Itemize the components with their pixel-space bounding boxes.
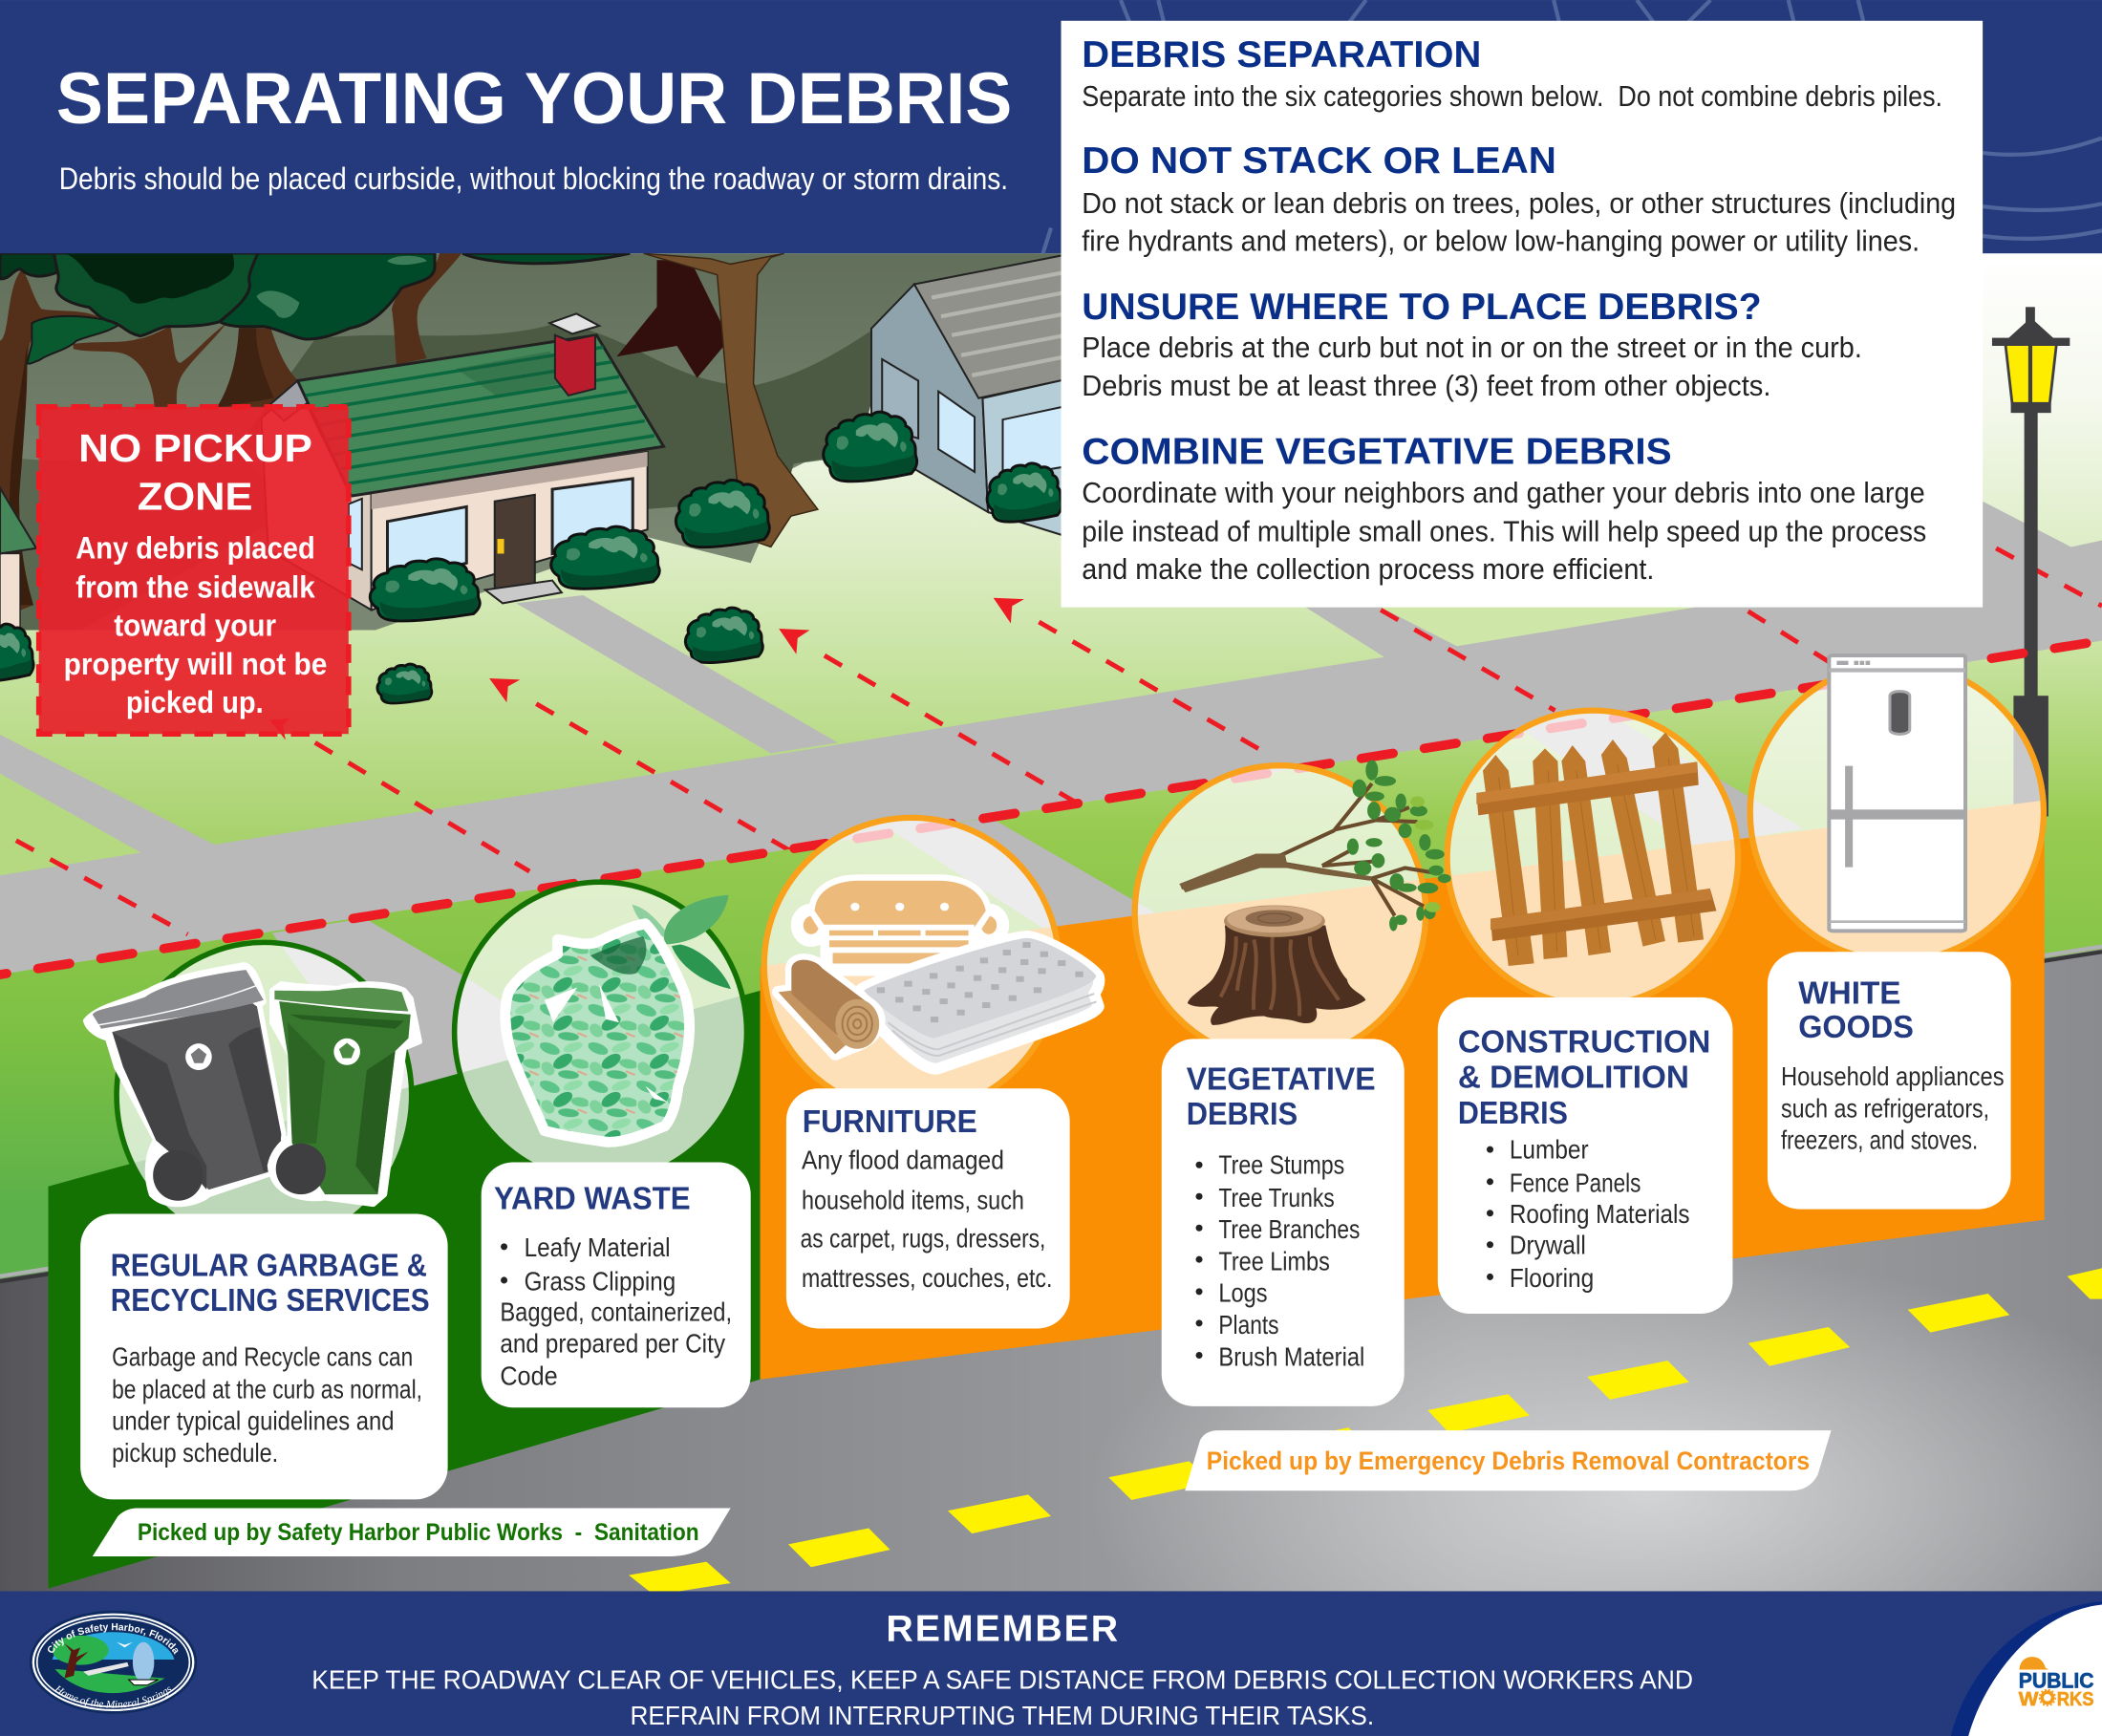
heading: debris separation: DEBRIS SEPARATION bbox=[1082, 34, 1481, 75]
text: construction list: Lumber bbox=[1510, 1134, 1589, 1164]
text: vegetative list: Plants bbox=[1218, 1310, 1279, 1340]
card: furniture bbox=[786, 1088, 1070, 1328]
heading: construction and demolition: DEBRIS bbox=[1458, 1096, 1568, 1131]
heading: furniture: FURNITURE bbox=[803, 1104, 977, 1140]
footer band bbox=[0, 1591, 2102, 1736]
text: combine: and make the collection process more efficient. bbox=[1082, 554, 1654, 586]
text: vegetative list bbox=[1196, 1150, 1364, 1372]
text: no pickup body: Any debris placed bbox=[75, 530, 315, 565]
heading: no pickup zone: ZONE bbox=[138, 475, 252, 519]
text: no pickup body: toward your bbox=[114, 609, 276, 643]
text: vegetative list: Brush Material bbox=[1218, 1342, 1364, 1372]
text: remember message: KEEP THE ROADWAY CLEAR OF VEHICLES, KEEP A SAFE DISTANCE FROM DEBRIS COLLECTION WORKERS AND bbox=[311, 1664, 1693, 1694]
icon: sofa, rolled carpet and mattress bbox=[779, 881, 1099, 1069]
heading: construction and demolition: CONSTRUCTION bbox=[1458, 1024, 1710, 1060]
text: vegetative list: Logs bbox=[1218, 1277, 1268, 1307]
label: picked up by contractors: Picked up by Emergency Debris Removal Contractors bbox=[1207, 1447, 1810, 1475]
text: construction list: Flooring bbox=[1510, 1263, 1594, 1293]
heading: vegetative debris: VEGETATIVE bbox=[1187, 1062, 1376, 1098]
text: debris separation: Separate into the six categories shown below. Do not combine debris piles. bbox=[1082, 81, 1942, 113]
text: white goods body: Household appliances bbox=[1781, 1061, 2005, 1091]
text: no pickup body: picked up. bbox=[126, 685, 264, 719]
heading: regular garbage and recycling bbox=[111, 1249, 430, 1318]
text: construction list: Drywall bbox=[1510, 1230, 1586, 1259]
text: yard waste list: Leafy Material bbox=[525, 1232, 671, 1262]
text: construction list bbox=[1487, 1134, 1690, 1293]
icon: public works logo: PUBLIC bbox=[2019, 1668, 2094, 1692]
label: picked up by public works: Picked up by Safety Harbor Public Works - Sanitation bbox=[138, 1519, 699, 1546]
circle: white goods bbox=[1750, 664, 2044, 961]
text: furniture body: Any flood damaged bbox=[802, 1145, 1004, 1174]
icon: public works logo bbox=[1951, 1601, 2102, 1736]
circle: construction debris bbox=[1448, 711, 1738, 1005]
trees bbox=[0, 253, 818, 618]
icon: city seal: Home of the Mineral Springs bbox=[55, 1685, 172, 1708]
title: SEPARATING YOUR DEBRIS bbox=[56, 58, 1012, 139]
header band bbox=[0, 0, 2102, 253]
text: do not stack: fire hydrants and meters), or below low-hanging power or utility lines. bbox=[1082, 225, 1920, 257]
text: combine: pile instead of multiple small ones. This will help speed up the process bbox=[1082, 516, 1926, 547]
icon: public works logo: RKS bbox=[2057, 1688, 2093, 1710]
icon: city seal: City of Safety Harbor, Florida bbox=[48, 1623, 178, 1655]
circle: furniture bbox=[764, 818, 1059, 1113]
text: remember message bbox=[311, 1664, 1693, 1730]
label: picked up by public works bbox=[93, 1508, 731, 1556]
green curb strip bbox=[0, 641, 2102, 1279]
text: vegetative list: Tree Trunks bbox=[1218, 1183, 1335, 1212]
heading: no pickup zone bbox=[78, 426, 312, 519]
text: yard waste list: Bagged, containerized, bbox=[500, 1297, 732, 1327]
lamp post bbox=[1992, 307, 2070, 816]
icon: city seal bbox=[30, 1611, 197, 1714]
card: regular garbage and recycling bbox=[80, 1213, 448, 1499]
orange contractor panel bbox=[761, 801, 2045, 1380]
lawn corner bbox=[0, 774, 140, 875]
heading: remember: REMEMBER bbox=[886, 1607, 1118, 1649]
text: no pickup body: property will not be bbox=[64, 647, 327, 681]
text: white goods body: such as refrigerators, bbox=[1781, 1094, 1989, 1124]
text: construction list: Fence Panels bbox=[1510, 1168, 1641, 1197]
text: white goods body: freezers, and stoves. bbox=[1781, 1125, 1978, 1154]
text: furniture body: mattresses, couches, etc. bbox=[802, 1263, 1052, 1293]
text: vegetative list: Tree Limbs bbox=[1218, 1246, 1330, 1275]
text: garbage body: Garbage and Recycle cans can bbox=[112, 1341, 413, 1371]
panel: no pickup zone bbox=[39, 407, 349, 734]
icon: public works logo: W bbox=[2019, 1688, 2039, 1710]
text: combine bbox=[1082, 478, 1926, 586]
heading: regular garbage and recycling: RECYCLING SERVICES bbox=[111, 1283, 430, 1318]
text: remember message: REFRAIN FROM INTERRUPTING THEM DURING THEIR TASKS. bbox=[630, 1701, 1374, 1730]
text: garbage body: pickup schedule. bbox=[112, 1438, 278, 1468]
circle: garbage and recycling bbox=[117, 942, 412, 1248]
heading: white goods bbox=[1798, 975, 1914, 1045]
text: yard waste list: Code bbox=[500, 1361, 558, 1390]
yellow road dashes bbox=[629, 1268, 2102, 1596]
card: construction and demolition debris bbox=[1438, 997, 1732, 1314]
heading: construction and demolition: & DEMOLITION bbox=[1458, 1061, 1689, 1096]
subtitle: Debris should be placed curbside, without blocking the roadway or storm drains. bbox=[59, 161, 1008, 196]
text: furniture body bbox=[801, 1145, 1052, 1293]
icon: wooden fence panel bbox=[1476, 733, 1716, 966]
text: furniture body: as carpet, rugs, dressers, bbox=[801, 1223, 1045, 1253]
text: do not stack: Do not stack or lean debris on trees, poles, or other structures (including bbox=[1082, 188, 1956, 220]
sidewalk and driveways bbox=[0, 502, 2102, 975]
heading: do not stack or lean: DO NOT STACK OR LEAN bbox=[1082, 140, 1556, 182]
card: vegetative debris bbox=[1162, 1039, 1405, 1406]
text: vegetative list: Tree Branches bbox=[1218, 1214, 1360, 1244]
text: unsure: Debris must be at least three (3) feet from other objects. bbox=[1082, 371, 1770, 402]
text: furniture body: household items, such bbox=[802, 1186, 1024, 1215]
circle: vegetative debris bbox=[1135, 765, 1426, 1061]
heading: no pickup zone: NO PICKUP bbox=[78, 426, 312, 470]
text: yard waste list: Grass Clipping bbox=[525, 1266, 676, 1296]
blue neighbouring house bbox=[871, 255, 1065, 536]
left neighbouring house bbox=[0, 488, 36, 630]
text: construction list: Roofing Materials bbox=[1510, 1199, 1690, 1229]
driveway crossings bbox=[272, 716, 1803, 1113]
text: garbage body: be placed at the curb as normal, bbox=[112, 1374, 422, 1404]
heading: construction and demolition bbox=[1458, 1024, 1710, 1131]
shrubs bbox=[0, 412, 1062, 703]
text: do not stack bbox=[1082, 188, 1956, 257]
panel: debris guidance bbox=[1062, 21, 1983, 608]
roadway bbox=[0, 947, 2102, 1596]
wooded backdrop bbox=[0, 253, 1062, 630]
heading: vegetative debris bbox=[1187, 1062, 1376, 1132]
green sanitation panel bbox=[49, 991, 761, 1589]
icon: refrigerator bbox=[1829, 655, 1965, 931]
icon: bagged yard waste with leaves bbox=[505, 895, 731, 1142]
text: yard waste list: and prepared per City bbox=[500, 1329, 725, 1359]
label: picked up by contractors bbox=[1185, 1430, 1832, 1490]
icon: garbage and recycling bins bbox=[86, 965, 419, 1204]
text: yard waste list bbox=[500, 1232, 732, 1390]
heading: unsure where to place debris: UNSURE WHERE TO PLACE DEBRIS? bbox=[1082, 287, 1762, 328]
text: garbage body: under typical guidelines and bbox=[112, 1406, 394, 1436]
header line pattern bbox=[1043, 0, 2102, 253]
text: unsure: Place debris at the curb but not in or on the street or in the curb. bbox=[1082, 332, 1862, 364]
red dashed property lines with arrows bbox=[16, 548, 2102, 934]
heading: vegetative debris: DEBRIS bbox=[1187, 1097, 1298, 1132]
text: unsure bbox=[1082, 332, 1862, 402]
card: white goods bbox=[1768, 952, 2011, 1210]
text: white goods body bbox=[1781, 1061, 2005, 1154]
text: combine: Coordinate with your neighbors and gather your debris into one large bbox=[1082, 478, 1925, 509]
heading: combine vegetative debris: COMBINE VEGETATIVE DEBRIS bbox=[1082, 431, 1672, 472]
heading: white goods: WHITE bbox=[1798, 975, 1901, 1011]
red dashed curb line bbox=[0, 641, 2102, 975]
card: yard waste bbox=[482, 1162, 751, 1407]
heading: yard waste: YARD WASTE bbox=[494, 1182, 691, 1217]
heading: white goods: GOODS bbox=[1798, 1010, 1914, 1045]
main house bbox=[262, 313, 664, 610]
icon: tree stump and branch bbox=[1179, 760, 1451, 1025]
heading: regular garbage and recycling: REGULAR GARBAGE & bbox=[111, 1249, 427, 1284]
circle: yard waste bbox=[455, 882, 747, 1183]
text: garbage body bbox=[112, 1341, 422, 1468]
text: no pickup body bbox=[64, 530, 327, 719]
text: no pickup body: from the sidewalk bbox=[75, 570, 315, 605]
lawn background bbox=[0, 253, 2102, 1004]
text: vegetative list: Tree Stumps bbox=[1218, 1150, 1344, 1180]
